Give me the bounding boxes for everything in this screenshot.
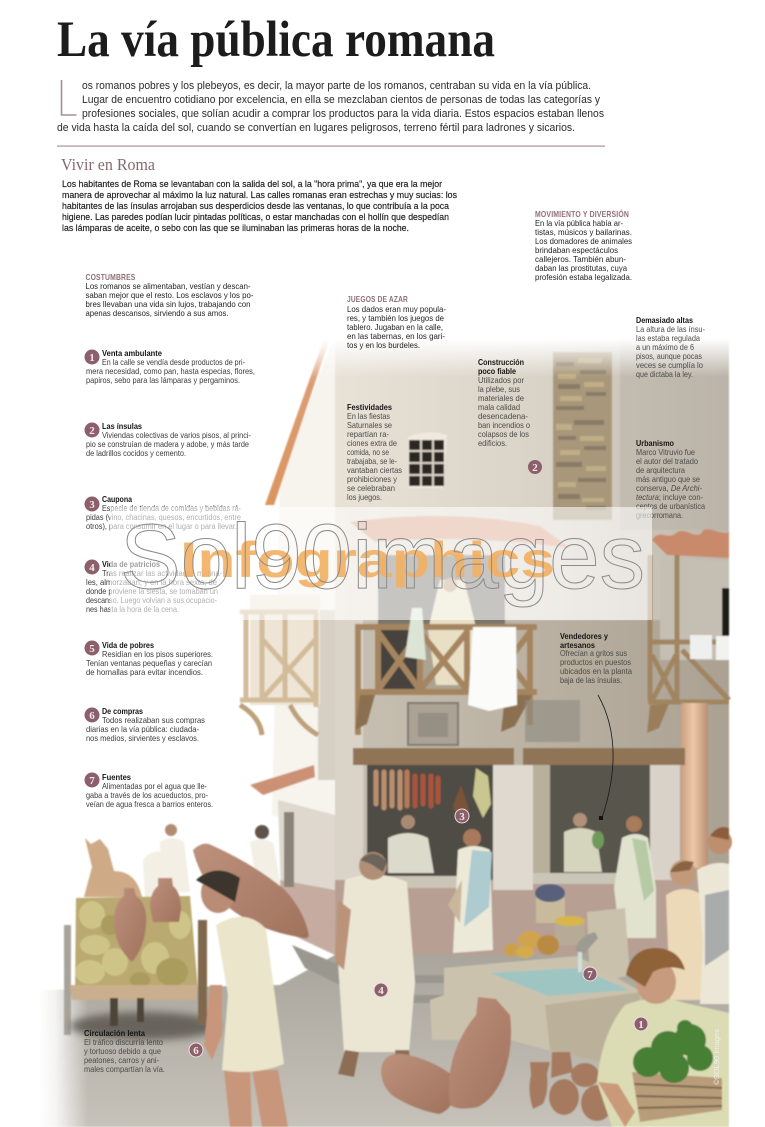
text block: Movimiento y diversión: Los domadores de animales: [535, 236, 632, 246]
text block: Urbanismo: de arquitectura: [636, 465, 685, 475]
building front wall: [335, 325, 729, 955]
text block: Urbanismo: más antiguo que se: [636, 474, 700, 484]
text block: Movimiento y diversión: brindaban espectáculos: [535, 245, 618, 255]
text block: Urbanismo: tectura; incluye con-: [636, 492, 703, 502]
text block: Demasiado altas: las estaba regulada: [636, 333, 700, 343]
left fade to white: [38, 960, 88, 1127]
crate: [632, 1072, 722, 1122]
intro paragraph: profesiones sociales, que solían acudir a comprar los productos para la vida diaria. Estos espacios estaban llenos: [82, 108, 604, 120]
marker 2: [528, 460, 542, 474]
leader line to shop: [598, 695, 613, 820]
stone column: [681, 703, 708, 868]
text block: Circulación lenta: [84, 1028, 165, 1074]
title: La vía pública romana: [57, 12, 495, 68]
text block: Demasiado altas: La altura de las ínsu-: [636, 324, 705, 334]
horse: [84, 838, 142, 897]
marker 4: 4: [378, 985, 384, 997]
text block: Vivir en Roma: las lámparas de aceite, o sebo con las que se iluminaban las primeras horas de la noche.: [62, 223, 409, 233]
tiled roof centre: [350, 516, 570, 548]
item 4: Vida de patricios: Tras realizar las actividades matina-: [102, 568, 222, 578]
text block: Movimiento y diversión: MOVIMIENTO Y DIVERSIÓN: [535, 208, 629, 219]
text block: Juegos de azar: JUEGOS DE AZAR: [347, 295, 408, 304]
women at right: [666, 827, 732, 1004]
item 4: Vida de patricios: 4: [89, 562, 95, 574]
item 3: Caupona: [84, 494, 241, 531]
text block: Juegos de azar: Los dados eran muy popula-: [347, 304, 446, 314]
item 6: De compras: nos medios, sirvientes y esclavos.: [86, 733, 199, 743]
intro paragraph: os romanos pobres y los plebeyos, es decir, la mayor parte de los romanos, centraban su vida en la vía pública.: [82, 80, 591, 92]
taberna left: [367, 765, 493, 880]
item 1: Venta ambulante: [84, 348, 255, 385]
text block: Construcción poco fiable: Utilizados por: [478, 375, 524, 385]
item 5: Vida de pobres: 5: [89, 643, 95, 655]
item 2: Las ínsulas: [84, 421, 251, 458]
text block: Demasiado altas: Demasiado altas: [636, 315, 693, 325]
market goods: [504, 884, 585, 958]
item 2: Las ínsulas: pio se construían de madera y adobe, y más tarde: [86, 439, 249, 449]
fountain: [430, 908, 642, 1062]
text block: Vendedores y artesanos: Ofrecían a gritos sus: [560, 648, 627, 658]
shopkeeper with greens: [564, 813, 604, 872]
item 7: Fuentes: Alimentadas por el agua que lle-: [102, 781, 207, 791]
item 4: Vida de patricios: donde proviene la siesta, se tomaban un: [86, 586, 218, 596]
item 3: Caupona: pidas (vino, chacinas, quesos, encurtidos, entre: [86, 512, 241, 522]
roof eave: [265, 332, 332, 505]
item 7: Fuentes: veían de agua fresca a barrios enteros.: [86, 799, 213, 809]
intro paragraph: Lugar de encuentro cotidiano por excelencia, en ella se mezclaban cientos de personas de todas las categorías y: [82, 94, 600, 106]
text block: Vivir en Roma: higiene. Las paredes podían lucir pintadas políticas, o estar manchadas con el hollín que despedían: [62, 212, 449, 222]
text block: Demasiado altas: pisos, aunque pocas: [636, 351, 702, 361]
text block: Festividades: trabajaba, se le-: [347, 456, 397, 466]
text block: Circulación lenta: El tráfico discurría lento: [84, 1037, 163, 1047]
background pedestrians: [143, 824, 280, 898]
item 5: Vida de pobres: Tenían ventanas pequeñas y carecían: [86, 658, 212, 668]
text block: Circulación lenta: y tortuoso debido a que: [84, 1046, 161, 1056]
item 1: Venta ambulante: papiros, sebo para las lámparas y pergaminos.: [86, 375, 240, 385]
intro paragraph: [57, 80, 604, 134]
marker 3: [455, 809, 469, 823]
text block: Urbanismo: [636, 438, 705, 520]
marker 1: [634, 1017, 648, 1031]
item 5: Vida de pobres: [84, 640, 213, 677]
item 3: Caupona: Caupona: [102, 494, 132, 504]
text block: Vendedores y artesanos: productos en puestos: [560, 657, 631, 667]
small pots: [529, 1052, 613, 1121]
text block: Festividades: ciones extra de: [347, 438, 397, 448]
text block: Demasiado altas: veces se cumplía lo: [636, 360, 703, 370]
item 2: Las ínsulas: Viviendas colectivas de varios pisos, al princi-: [102, 430, 251, 440]
text block: Costumbres: Los romanos se alimentaban, vestían y descan-: [86, 281, 251, 291]
text block: Juegos de azar: en las tabernas, en los gari-: [347, 331, 445, 341]
text block: Festividades: se celebraban: [347, 483, 395, 493]
item 6: De compras: [84, 706, 205, 743]
text block: Juegos de azar: res, y también los juegos de: [347, 313, 444, 323]
drop cap: [62, 80, 76, 115]
text block: Construcción poco fiable: Construcción: [478, 357, 524, 367]
text block: Urbanismo: Marco Vitruvio fue: [636, 447, 695, 457]
text block: Festividades: vantaban ciertas: [347, 465, 402, 475]
text block: Construcción poco fiable: colapsos de los: [478, 429, 529, 439]
item 4: Vida de patricios: descanso. Luego volvían a sus ocupacio-: [86, 595, 217, 605]
upper window: [408, 432, 447, 488]
text block: Costumbres: saban mejor que el resto. Los esclavos y los po-: [86, 290, 254, 300]
heading: Vivir en Roma: Vivir en Roma: [61, 155, 155, 174]
item 6: De compras: Todos realizaban sus compras: [102, 715, 205, 725]
text block: Circulación lenta: peatones, carros y ani-: [84, 1055, 159, 1065]
item 5: Vida de pobres: Vida de pobres: [102, 640, 154, 650]
marker 3: 3: [459, 811, 465, 823]
awning: [250, 765, 315, 795]
item 2: Las ínsulas: 2: [89, 425, 95, 437]
text block: Vendedores y artesanos: [560, 631, 632, 685]
wall relief: [408, 703, 458, 745]
text block: Costumbres: apenas descansos, sirviendo a sus amos.: [86, 308, 228, 318]
item 6: De compras: diarias en la vía pública: ciudada-: [86, 724, 199, 734]
credit: ©SOL90 Images: [712, 1029, 721, 1085]
text block: Vendedores y artesanos: ubicados en la planta: [560, 666, 632, 676]
marker 6: 6: [193, 1045, 199, 1057]
woman in green: [614, 816, 656, 938]
text block: Festividades: Festividades: [347, 402, 392, 412]
hanging white cloth: [468, 627, 517, 711]
watermark: Infographics: [180, 532, 555, 588]
woman in blue: [448, 829, 493, 953]
left balcony: [240, 612, 318, 735]
hanging sausages: [376, 772, 438, 808]
text block: Construcción poco fiable: ban incendios o: [478, 420, 530, 430]
text block: Festividades: repartían ra-: [347, 429, 389, 439]
item 6: De compras: De compras: [102, 706, 143, 716]
marker 1: 1: [638, 1019, 644, 1031]
item 5: Vida de pobres: Residían en los pisos superiores.: [102, 649, 213, 659]
shopkeeper: [388, 815, 434, 873]
text block: Vivir en Roma: habitantes de las ínsulas arrojaban sus desperdicios desde las ventanas, lo que contribuía a la poca: [62, 201, 449, 211]
text block: Costumbres: bres llevaban una vida sin lujos, trabajando con: [86, 299, 251, 309]
hanging green cloth: [405, 608, 426, 660]
hanging meat: [473, 768, 491, 818]
text block: Construcción poco fiable: desencadena-: [478, 411, 528, 421]
text block: Urbanismo: ceptos de urbanística: [636, 501, 705, 511]
tiled roof right: [652, 529, 729, 558]
item 7: Fuentes: [84, 772, 213, 809]
text block: Festividades: [347, 402, 402, 502]
text block: Vendedores y artesanos: artesanos: [560, 640, 595, 650]
item 3: Caupona: 3: [89, 499, 95, 511]
man with amphora: [193, 844, 309, 1127]
text block: Urbanismo: conserva, De Archi-: [636, 483, 702, 493]
patched stone: [525, 700, 580, 742]
counters: [367, 873, 618, 888]
wooden beams: [353, 748, 685, 765]
item 5: Vida de pobres: de hornallas para evitar incendios.: [86, 667, 203, 677]
text block: Movimiento y diversión: daban las prostitutas, cuya: [535, 263, 627, 273]
building side wall: [250, 335, 335, 955]
text block: Demasiado altas: que dictaba la ley.: [636, 369, 693, 379]
upper doorway: [378, 555, 505, 625]
cart amphorae: [114, 878, 181, 962]
marker 7: 7: [587, 969, 593, 981]
text block: Movimiento y diversión: profesión estaba legalizada.: [535, 272, 632, 282]
text block: Festividades: Saturnales se: [347, 420, 392, 430]
text block: Construcción poco fiable: mala calidad: [478, 402, 520, 412]
item 3: Caupona: otros), para consumir en el lugar o para llevar.: [86, 521, 237, 531]
text block: Urbanismo: el autor del tratado: [636, 456, 698, 466]
boy with crate: [597, 948, 729, 1127]
item 1: Venta ambulante: En la calle se vendía desde productos de pri-: [102, 357, 245, 367]
text block: Vendedores y artesanos: Vendedores y: [560, 631, 608, 641]
text block: Movimiento y diversión: [535, 208, 632, 282]
item 2: Las ínsulas: Las ínsulas: [102, 421, 142, 431]
steps: [292, 945, 455, 1003]
item 7: Fuentes: Fuentes: [102, 772, 131, 782]
watermark: Sol90images: [120, 506, 645, 608]
text block: Festividades: comida, no se: [347, 447, 389, 457]
taberna right: [533, 765, 650, 875]
item 1: Venta ambulante: mera necesidad, como pan, hasta especias, flores,: [86, 366, 255, 376]
text block: Juegos de azar: [347, 295, 446, 350]
text block: Costumbres: COSTUMBRES: [86, 273, 136, 282]
text block: Circulación lenta: Circulación lenta: [84, 1028, 145, 1038]
text block: Construcción poco fiable: poco fiable: [478, 366, 516, 376]
text block: Movimiento y diversión: En la vía pública había ar-: [535, 218, 623, 228]
text block: Circulación lenta: males compartían la vía.: [84, 1064, 165, 1074]
text block: Juegos de azar: tos y en los burdeles.: [347, 340, 420, 350]
item 4: Vida de patricios: les, almorzaban, y en la hora sexta, de: [86, 577, 217, 587]
right balcony: [647, 555, 729, 733]
marker 2: 2: [532, 462, 538, 474]
text block: Festividades: En las fiestas: [347, 411, 390, 421]
text block: Movimiento y diversión: tistas, músicos y bailarinas.: [535, 227, 632, 237]
text block: Juegos de azar: tablero. Jugaban en la calle,: [347, 322, 443, 332]
item 2: Las ínsulas: de ladrillos cocidos y cemento.: [86, 448, 186, 458]
text block: Costumbres: [86, 273, 254, 318]
item 7: Fuentes: gaba a través de los acueductos, pro-: [86, 790, 208, 800]
marker 7: [583, 967, 597, 981]
text block: Vendedores y artesanos: baja de las ínsulas.: [560, 675, 622, 685]
cart: [64, 878, 220, 1040]
street: [40, 955, 729, 1127]
item 4: Vida de patricios: [84, 559, 222, 614]
brick pier: [553, 352, 612, 520]
text block: Urbanismo: Urbanismo: [636, 438, 674, 448]
text block: Vivir en Roma: [62, 179, 457, 233]
text block: Construcción poco fiable: materiales de: [478, 393, 524, 403]
text block: Demasiado altas: [636, 315, 705, 379]
intro paragraph: de vida hasta la caída del sol, cuando se convertían en lugares peligrosos, terreno fértil para ladrones y sicarios.: [57, 122, 575, 134]
text block: Urbanismo: grecorromana.: [636, 510, 683, 520]
centre balcony: [355, 578, 537, 735]
text block: Construcción poco fiable: edificios.: [478, 438, 507, 448]
text block: Demasiado altas: a un máximo de 6: [636, 342, 694, 352]
marker 6: [189, 1043, 203, 1057]
text block: Vivir en Roma: manera de aprovechar al máximo la luz natural. Las calles romanas eran estrechas y muy sucias: los: [62, 190, 457, 200]
item 3: Caupona: Especie de tienda de comidas y bebidas rá-: [102, 503, 241, 513]
text block: Festividades: prohibiciones y: [347, 474, 398, 484]
text block: Vivir en Roma: Los habitantes de Roma se levantaban con la salida del sol, a la "hora prima", ya que era la mejor: [62, 179, 442, 189]
text block: Construcción poco fiable: [478, 357, 530, 448]
text block: Festividades: los juegos.: [347, 492, 382, 502]
text block: Construcción poco fiable: la plebe, sus: [478, 384, 520, 394]
item 4: Vida de patricios: nes hasta la hora de la cena.: [86, 604, 179, 614]
text block: Movimiento y diversión: callejeros. También abun-: [535, 254, 626, 264]
basil: [633, 1020, 713, 1083]
marker 4: [374, 983, 388, 997]
item 7: Fuentes: 7: [89, 775, 95, 787]
man in toga: [335, 852, 415, 1077]
illustration: Roman street scene: [38, 322, 740, 1127]
wall fade to white: [270, 322, 740, 377]
item 6: De compras: 6: [89, 710, 95, 722]
item 1: Venta ambulante: 1: [89, 352, 95, 364]
amphorae on ground: [381, 997, 511, 1114]
item 4: Vida de patricios: Vida de patricios: [102, 559, 160, 569]
item 1: Venta ambulante: Venta ambulante: [102, 348, 162, 358]
